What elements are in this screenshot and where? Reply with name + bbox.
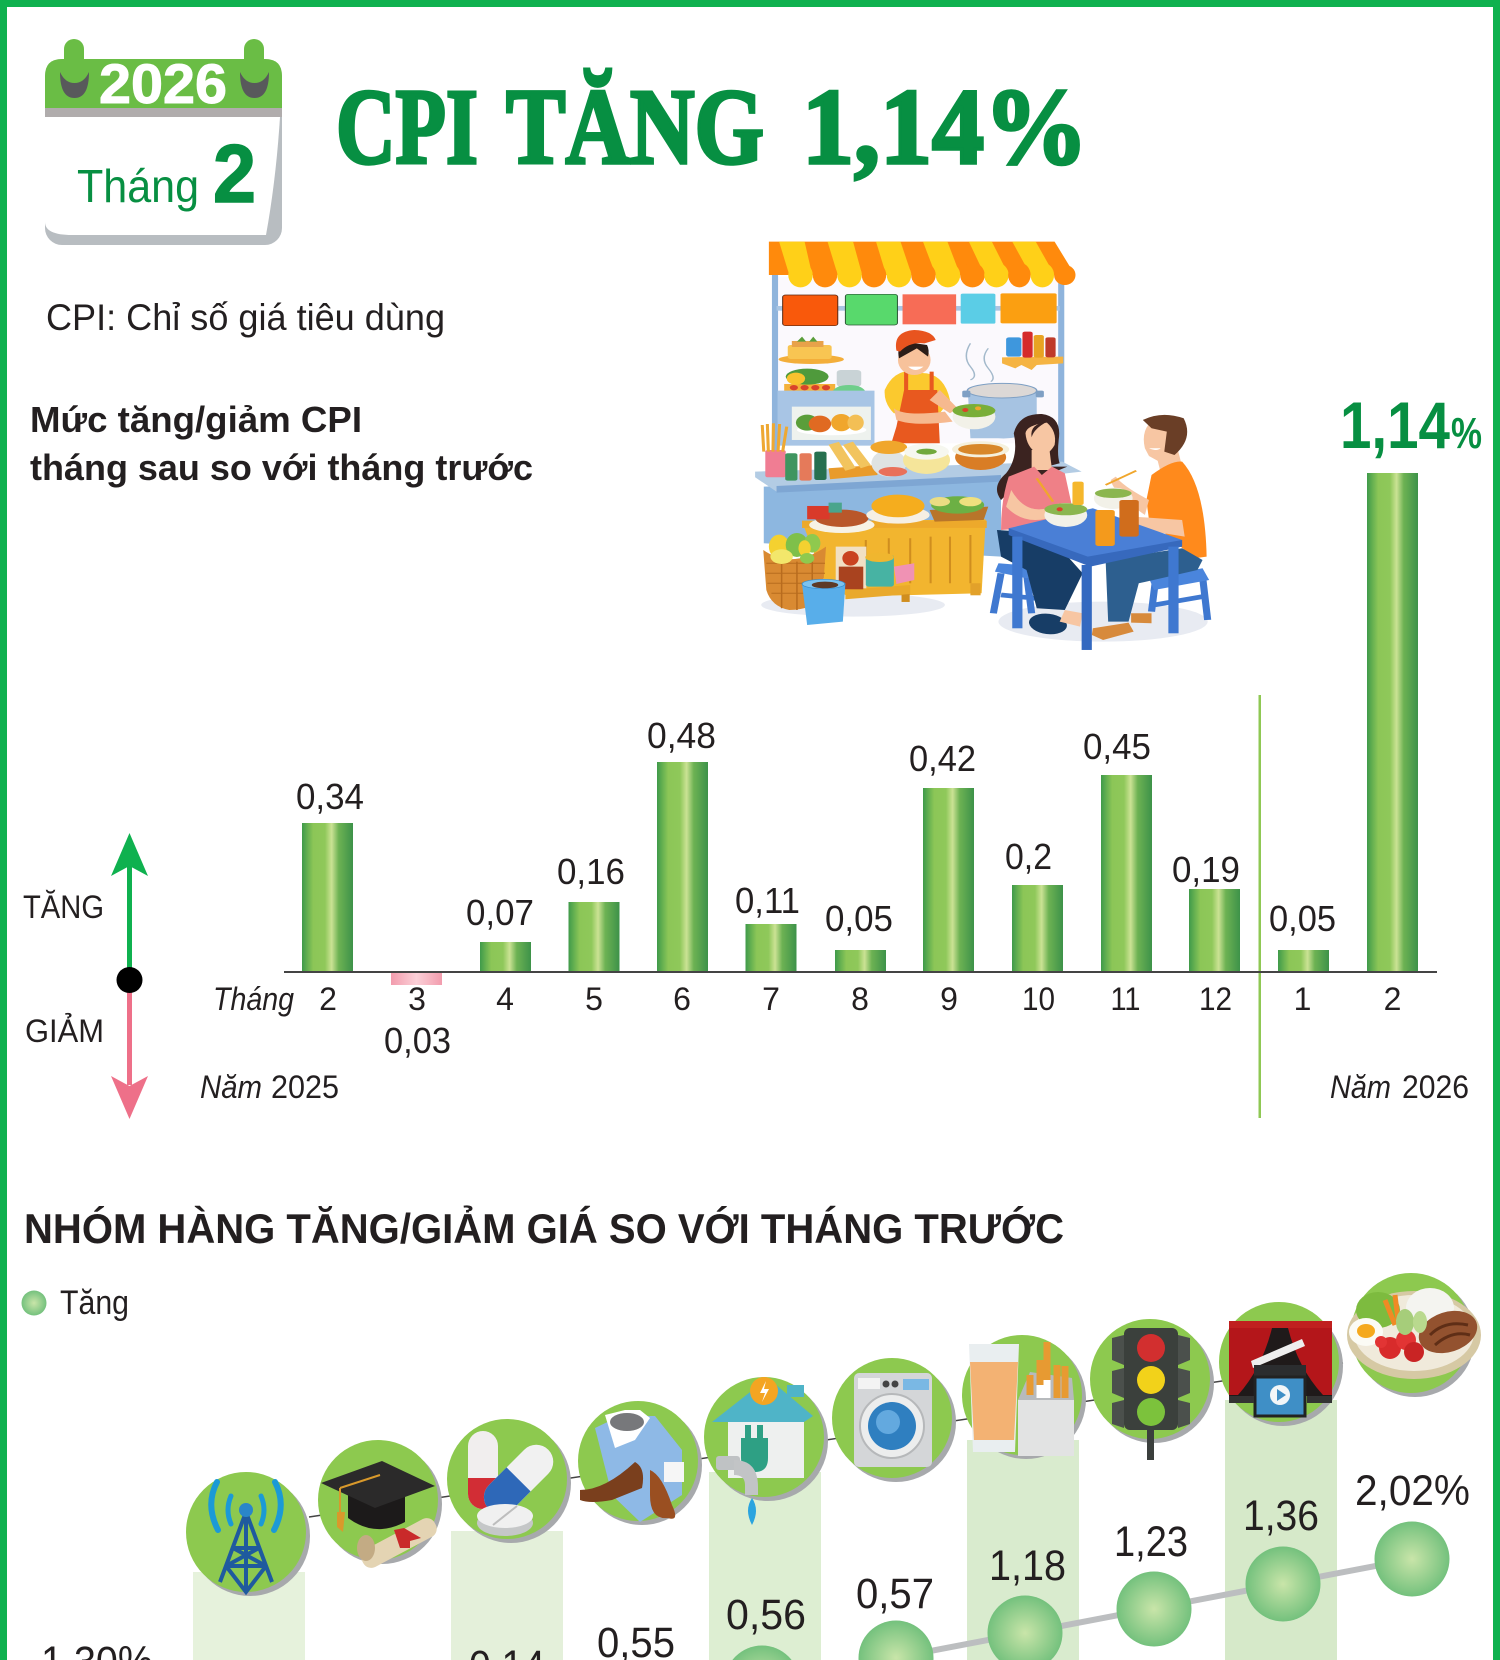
connector to icons (309, 1363, 1343, 1517)
icon: theatre and film (1219, 1302, 1343, 1426)
alternating column bands (193, 1400, 1337, 1660)
man customer (1092, 415, 1207, 640)
value labels: 1,23 (1114, 1518, 1188, 1566)
icon: beverage and cigarettes (962, 1335, 1086, 1459)
big value label: 1,14%: 1,14 (1340, 388, 1450, 462)
data dots (724, 1522, 1450, 1660)
section heading: goods groups: NHÓM HÀNG TĂNG/GIẢM GIÁ SO VỚI THÁNG TRƯỚC (24, 1204, 1064, 1252)
title: TĂNG (506, 68, 764, 187)
month labels: Tháng (213, 981, 294, 1017)
stools (993, 563, 1209, 620)
month labels: 11 (1110, 981, 1140, 1017)
icon: calendar badge (45, 39, 282, 245)
illustration: street food stall with customers (755, 242, 1209, 650)
woman customer (997, 414, 1083, 638)
month labels: 1 (1294, 981, 1311, 1017)
month labels: 2 (1384, 981, 1401, 1017)
awning (769, 242, 1076, 287)
calendar month: Tháng (77, 160, 199, 212)
value labels: 1,36 (1243, 1492, 1319, 1540)
title: CPI (336, 68, 478, 187)
value labels: 0,48 (647, 715, 716, 756)
year divider (1258, 695, 1261, 1118)
left shelves with food (778, 337, 874, 446)
month labels: 6 (673, 981, 691, 1017)
icon: medicine capsules (447, 1419, 571, 1543)
shelf with bottles (1002, 332, 1063, 370)
value labels: 0,05 (825, 898, 893, 939)
chef (885, 330, 995, 443)
month labels: 9 (940, 981, 958, 1017)
trend line (700, 1559, 1412, 1660)
lower food and crate (802, 495, 988, 602)
value labels: 0,45 (1083, 726, 1151, 767)
value labels: 1,18 (989, 1542, 1066, 1590)
signboards (783, 293, 1057, 326)
month labels: 5 (585, 981, 603, 1017)
value labels: 0,42 (909, 738, 976, 779)
table (1009, 471, 1182, 650)
icon: housing, electricity and water (704, 1377, 828, 1525)
chart heading (30, 399, 533, 488)
counter (755, 423, 1082, 557)
dot chart: goods group increases (41, 1363, 1470, 1660)
icon: food plate (1347, 1273, 1483, 1397)
value labels: 0,56 (726, 1591, 806, 1639)
year labels: 2025 (271, 1069, 339, 1105)
value labels: 0,16 (557, 851, 625, 892)
month labels: 3 (408, 981, 426, 1017)
chart heading: Mức tăng/giảm CPI (30, 399, 362, 440)
year labels: Năm (1330, 1069, 1391, 1105)
subtitle: CPI definition: CPI: Chỉ số giá tiêu dùng (46, 297, 445, 338)
value labels: 0,07 (466, 892, 534, 933)
value labels: 0,57 (856, 1570, 934, 1618)
month labels: 7 (762, 981, 780, 1017)
value labels (296, 715, 1336, 1061)
value labels: 0,19 (1172, 849, 1240, 890)
value labels: 0,03 (384, 1020, 451, 1061)
month labels: 4 (496, 981, 514, 1017)
year labels: 2026 (1402, 1069, 1469, 1105)
value labels: 0,2 (1005, 836, 1052, 877)
value labels: 2,02% (1355, 1467, 1470, 1515)
value labels: 0,34 (296, 776, 364, 817)
icon: shirt and shoes (578, 1401, 702, 1525)
month labels: 8 (851, 981, 869, 1017)
legend: increase: Tăng (60, 1284, 129, 1322)
icon: graduation cap (318, 1440, 442, 1571)
basket and bucket (763, 533, 845, 625)
big value label: 1,14%: % (1451, 409, 1482, 458)
chart heading: tháng sau so với tháng trước (30, 447, 533, 488)
month labels: 10 (1022, 981, 1055, 1017)
title: 1,14% (802, 68, 1088, 187)
value labels (41, 1467, 1470, 1660)
value labels: 0,11 (735, 880, 800, 921)
bar chart: monthly CPI change (200, 473, 1469, 1118)
legend: up and down axis: GIẢM (25, 1013, 104, 1049)
icon: telecom tower (186, 1472, 310, 1596)
calendar year: 2026 (99, 52, 227, 115)
month labels (213, 981, 1401, 1017)
year labels: Năm (200, 1069, 262, 1105)
calendar month (77, 127, 256, 220)
month labels: 2 (319, 981, 337, 1017)
month labels: 12 (1199, 981, 1232, 1017)
steam and pot (962, 343, 1044, 439)
legend: up and down axis: TĂNG (23, 889, 104, 925)
value labels: 0,05 (1269, 898, 1336, 939)
icon: washing machine (832, 1358, 956, 1482)
year labels (200, 1069, 1469, 1105)
calendar month: 2 (213, 127, 256, 220)
legend: increase (22, 1284, 129, 1322)
legend: up and down axis (23, 833, 148, 1119)
icon: traffic light (1090, 1319, 1214, 1460)
bars (302, 473, 1418, 985)
